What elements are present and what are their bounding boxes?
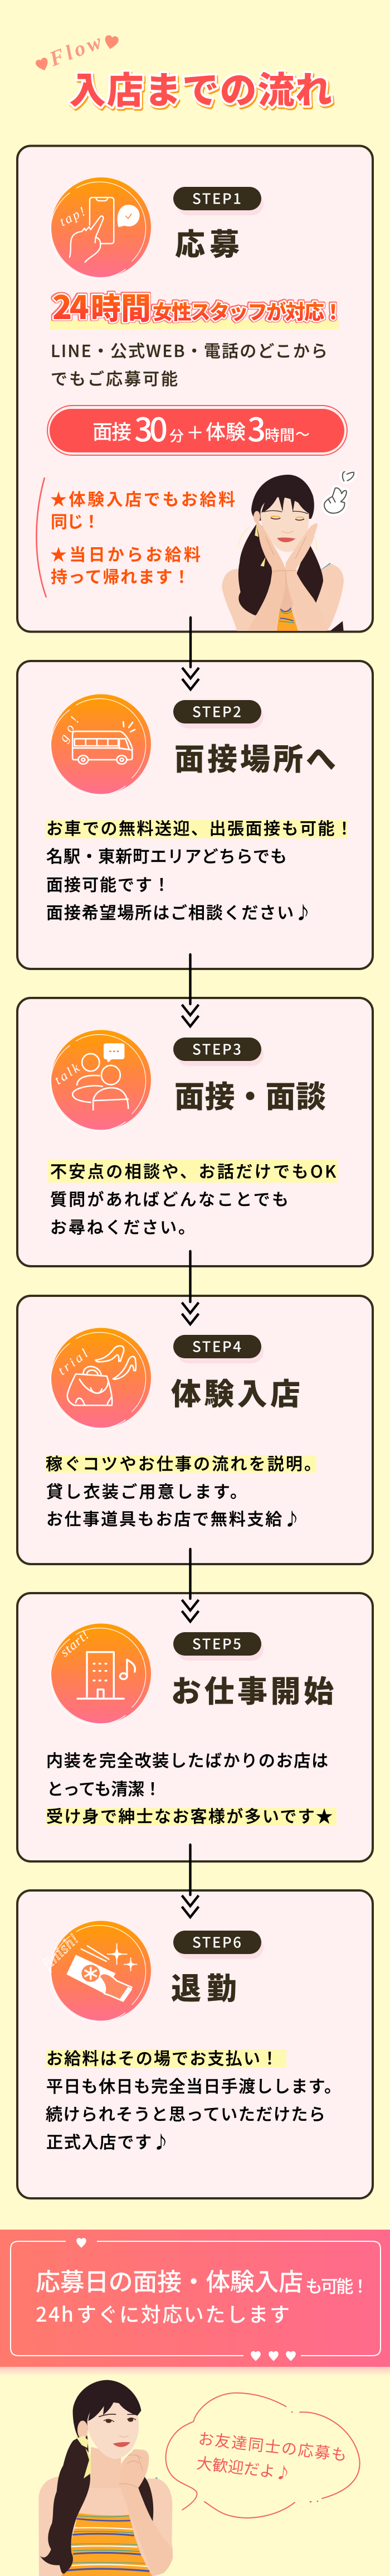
- step badge: [173, 1931, 264, 1959]
- time pill: 分: [169, 425, 184, 446]
- Flow label: Flow: [46, 30, 105, 71]
- panel: step 4: [17, 1296, 373, 1564]
- step badge: [173, 1335, 264, 1363]
- 24h staff headline: [50, 282, 343, 329]
- arrow: step 1 to 2: [182, 618, 199, 689]
- 24h staff headline: 女性スタッフが対応！: [153, 296, 343, 325]
- arrow: step 5 to 6: [182, 1845, 198, 1917]
- icon: bus: [51, 694, 151, 795]
- body text: 平日も休日も完全当日手渡しします。: [46, 2073, 341, 2097]
- banner text: 応募日の面接・体験入店: [36, 2262, 303, 2298]
- time pill: 面接: [92, 416, 131, 445]
- heading: お仕事開始: [171, 1667, 334, 1711]
- body text: 続けられそうと思っていただけたら: [46, 2101, 325, 2125]
- icon: bag and heels: [51, 1328, 151, 1429]
- body text: でもご応募可能: [51, 365, 178, 390]
- step badge: STEP3: [192, 1039, 241, 1059]
- step badge: [173, 1038, 264, 1066]
- panel: step 2: [17, 661, 373, 969]
- step badge: STEP4: [192, 1335, 241, 1357]
- Flow label: [35, 30, 119, 73]
- step badge: STEP6: [192, 1931, 241, 1952]
- icon: tap phone: tap!: [57, 204, 87, 229]
- body text: LINE・公式WEB・電話のどこから: [51, 337, 328, 362]
- banner text: も可能！: [305, 2273, 369, 2298]
- icon: bus: go!: [56, 714, 82, 745]
- time pill: 時間: [265, 423, 295, 445]
- icon: building: [51, 1623, 151, 1724]
- body text: 面接可能です！: [46, 871, 170, 896]
- speech bubble: [166, 2393, 360, 2518]
- heading: 面接場所へ: [174, 735, 336, 779]
- body text: 面接希望場所はご相談ください♪: [46, 899, 311, 924]
- body text: 不安点の相談や、お話だけでもOK: [50, 1158, 336, 1183]
- body text: とっても清潔！: [47, 1776, 161, 1800]
- panel: step 1: [17, 146, 373, 631]
- heading: 体験入店: [171, 1369, 300, 1414]
- panel: step 6: [17, 1890, 373, 2198]
- photo: woman with hands on cheeks: [222, 471, 354, 631]
- banner text: すぐに対応いたします: [76, 2299, 290, 2328]
- body text: [46, 1450, 321, 1530]
- time pill: 3: [247, 404, 266, 451]
- icon: talk: [51, 1030, 151, 1131]
- icon: bag and heels: trial: [55, 1347, 91, 1378]
- speech bubble: 大歓迎だよ♪: [196, 2451, 292, 2484]
- time pill: [47, 404, 347, 455]
- step badge: [173, 1632, 264, 1661]
- body text: 内装を完全改装したばかりのお店は: [46, 1747, 328, 1772]
- banner text: [36, 2262, 369, 2328]
- title: 入店までの流れ: [69, 61, 332, 114]
- icon: talk: talk: [52, 1060, 82, 1088]
- body text: お車での無料送迎、出張面接も可能！: [46, 815, 353, 840]
- time pill: ＋: [186, 419, 204, 445]
- panel: step 3: [17, 998, 373, 1266]
- body text: 受け身で紳士なお客様が多いです★: [46, 1803, 333, 1827]
- time pill: ～: [295, 423, 310, 444]
- speech bubble: お友達同士の応募も: [197, 2427, 348, 2466]
- step badge: STEP5: [192, 1633, 241, 1653]
- heading: 退勤: [171, 1964, 237, 2008]
- 24h staff headline: 時間: [91, 284, 151, 328]
- 24h staff headline: 24: [52, 282, 89, 329]
- icon: money: [39, 1921, 151, 2022]
- callout: ★体験入店でもお給料: [50, 486, 235, 510]
- body text: 名駅・東新町エリアどちらでも: [46, 843, 287, 867]
- banner text: 24h: [36, 2299, 74, 2328]
- body text: 正式入店です♪: [46, 2129, 169, 2153]
- body text: [51, 337, 328, 390]
- arrow: step 3 to 4: [182, 1251, 198, 1324]
- heading: 面接・面談: [174, 1072, 326, 1116]
- panel: same-day banner: [0, 2230, 390, 2376]
- icon: money: finish!: [39, 1931, 82, 1973]
- heading: 応募: [175, 220, 240, 264]
- time pill: 体験: [206, 416, 246, 445]
- step badge: [173, 187, 264, 215]
- body text: 質問があればどんなことでも: [50, 1186, 289, 1210]
- body text: [46, 1747, 337, 1827]
- photo: woman with hand at chin: [38, 2380, 173, 2576]
- callout: 持って帰れます！: [51, 563, 190, 588]
- arrow: step 2 to 3: [182, 954, 198, 1026]
- icon: hearts: [76, 2238, 296, 2361]
- body text: 稼ぐコツやお仕事の流れを説明。: [46, 1450, 321, 1475]
- icon: tap phone: [51, 177, 151, 278]
- callout: 同じ！: [51, 508, 100, 533]
- icon: building: start!: [58, 1628, 92, 1660]
- callout: ★当日からお給料: [50, 541, 201, 566]
- arrow: step 4 to 5: [182, 1549, 198, 1622]
- body text: お仕事道具もお店で無料支給♪: [46, 1506, 300, 1530]
- body text: 貸し衣装ご用意します。: [46, 1478, 247, 1503]
- body text: [46, 2045, 341, 2153]
- body text: お尋ねください。: [50, 1214, 195, 1238]
- panel: step 5: [17, 1593, 373, 1861]
- step badge: [173, 700, 264, 729]
- step badge: STEP2: [192, 701, 241, 722]
- body text: [46, 815, 353, 924]
- body text: お給料はその場でお支払い！: [46, 2045, 278, 2070]
- step badge: STEP1: [192, 187, 241, 209]
- callout: [36, 477, 235, 597]
- body text: [48, 1158, 338, 1238]
- time pill: 30: [134, 404, 168, 451]
